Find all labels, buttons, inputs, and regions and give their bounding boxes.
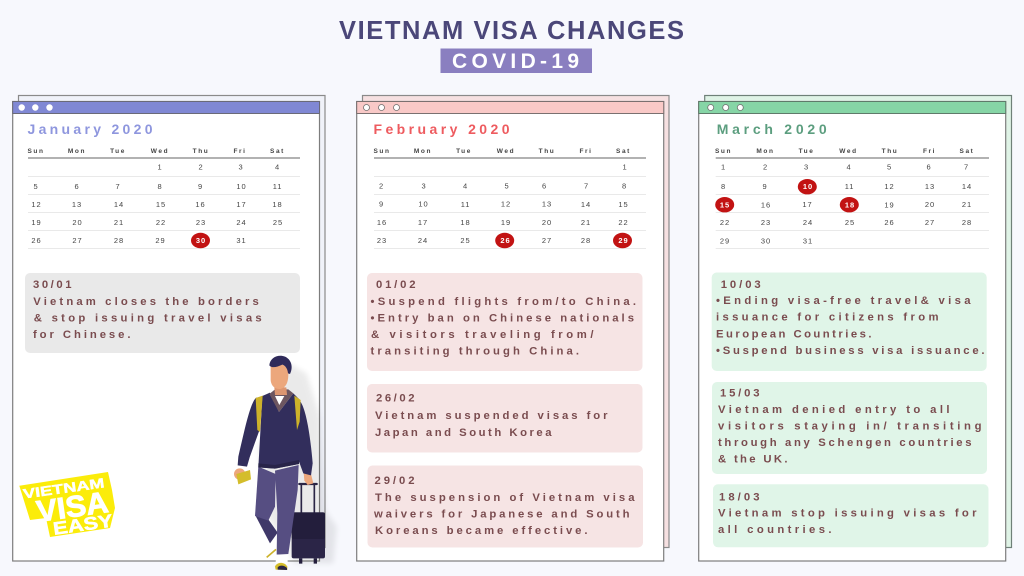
calendar: February: 29	[618, 236, 629, 245]
note: 15/03: Vietnam denied entry to all	[718, 404, 950, 416]
calendar: March: 2	[763, 162, 768, 172]
calendar: March: 8	[721, 182, 726, 191]
calendar: March: Tue	[799, 148, 814, 155]
note: 29/02: waivers for Japanese and South	[373, 509, 630, 521]
calendar: January: 27	[72, 236, 83, 245]
calendar: January: 19	[31, 218, 42, 227]
calendar: March: 5	[887, 162, 892, 172]
calendar: February: Fri	[579, 148, 593, 155]
calendar: January: 10	[236, 182, 247, 191]
calendar: March: 26	[884, 218, 895, 227]
calendar: March: Sun	[715, 148, 732, 155]
calendar: January: 1	[157, 162, 163, 172]
window header bar: March	[699, 102, 1006, 114]
calendar: February: 3	[421, 182, 427, 190]
calendar: March: 11	[845, 182, 854, 191]
calendar: January: Fri	[233, 148, 247, 155]
calendar: February: 22	[618, 218, 629, 227]
calendar: March: 19	[884, 200, 895, 209]
calendar: February: 10	[418, 200, 429, 208]
note: 29/02: 29/02	[374, 475, 414, 487]
calendar: January: 23	[196, 218, 206, 227]
calendar: February: Tue	[456, 148, 472, 155]
calendar: January: Wed	[151, 148, 169, 155]
calendar: January: 2	[198, 162, 204, 172]
calendar: February: Sat	[616, 148, 631, 155]
note: 26/02: Vietnam suspended visas for	[375, 410, 608, 422]
logo: Vietnam Visa Easy: EASY	[52, 511, 114, 539]
calendar: March: 7	[964, 162, 969, 172]
calendar: March: 18	[845, 200, 855, 209]
calendar: January: Thu	[193, 148, 209, 155]
calendar: January: 5	[33, 182, 39, 191]
calendar: January: 6	[74, 182, 80, 191]
note: 01/02: 01/02	[376, 279, 416, 291]
calendar: March: 23	[761, 218, 771, 227]
note: 26/02	[367, 384, 642, 452]
note: 30/01	[25, 273, 300, 353]
calendar: February: Wed	[497, 148, 515, 155]
note: 18/03: 18/03	[719, 492, 760, 504]
note: 01/02: transiting through China.	[370, 346, 579, 358]
calendar: January: 11	[273, 182, 282, 191]
note: 18/03	[713, 484, 988, 547]
note: 18/03: Vietnam stop issuing visas for	[718, 508, 977, 520]
calendar: March: 16	[761, 200, 771, 209]
calendar: February: 23	[377, 236, 387, 245]
calendar: February: Sun	[373, 148, 391, 155]
note: 15/03: visitors staying in/ transiting	[718, 421, 982, 433]
calendar: February: 27	[542, 236, 552, 245]
calendar: January: Sat	[270, 148, 285, 155]
note: 29/02: Koreans became effective.	[375, 525, 588, 537]
calendar: February: 15	[618, 200, 629, 209]
calendar: February: 9	[379, 200, 384, 208]
calendar: March: 22	[720, 218, 730, 227]
month heading: January 2020: January 2020	[28, 121, 153, 137]
calendar: March	[715, 148, 989, 248]
note: 01/02: & visitors traveling from/	[371, 329, 594, 341]
calendar: February: 14	[581, 200, 591, 209]
calendar: March: Fri	[923, 148, 936, 155]
logo: Vietnam Visa Easy: VISA	[34, 486, 110, 529]
note: 10/03: •Ending visa-free travel& visa	[716, 295, 971, 307]
calendar: January: 15	[156, 200, 166, 209]
calendar: March: 30	[761, 236, 771, 245]
calendar: February: 12	[501, 200, 511, 208]
calendar: January: 26	[31, 236, 42, 245]
note: 01/02	[367, 273, 642, 371]
note: 26/02: 26/02	[376, 393, 414, 405]
calendar: March: 10	[803, 182, 813, 191]
note: 10/03: 10/03	[721, 279, 761, 291]
note: 10/03: European Countries.	[716, 328, 872, 340]
calendar: January: 28	[114, 236, 124, 245]
calendar: January: 13	[72, 200, 82, 209]
calendar: January: 18	[272, 200, 283, 209]
calendar: February: 17	[418, 218, 428, 227]
calendar: January: 25	[273, 218, 283, 227]
window header bar: February	[357, 102, 664, 114]
note: 15/03: & the UK.	[718, 454, 788, 466]
calendar: March: 4	[846, 162, 852, 172]
illustration: traveller with suitcase	[234, 356, 337, 570]
note: 30/01: for Chinese.	[33, 329, 130, 341]
calendar: January	[27, 148, 300, 248]
note: 10/03: •Suspend business visa issuance.	[716, 345, 984, 357]
calendar: February: 7	[584, 182, 589, 190]
calendar: February: 25	[460, 236, 471, 245]
calendar: March: 3	[804, 162, 809, 172]
calendar: January: 24	[236, 218, 247, 227]
calendar: January: 8	[157, 182, 163, 191]
calendar: March: 20	[925, 200, 935, 209]
calendar: January: Mon	[68, 148, 86, 155]
month heading: March 2020: March 2020	[717, 121, 827, 137]
calendar: March: 25	[845, 218, 855, 227]
calendar: March: 12	[884, 182, 895, 191]
calendar: January: 16	[195, 200, 206, 209]
note: 29/02	[368, 466, 643, 548]
calendar: February: 2	[379, 182, 384, 190]
calendar: February: 5	[504, 182, 510, 190]
note: 01/02: •Entry ban on Chinese nationals	[370, 313, 634, 325]
calendar: February: 4	[463, 182, 468, 190]
calendar: January: 9	[198, 182, 203, 191]
calendar: March: 28	[962, 218, 972, 227]
panel: March 2020	[699, 96, 1012, 561]
title: VIETNAM VISA CHANGES	[339, 17, 684, 45]
calendar: January: 29	[155, 236, 166, 245]
calendar: February: 20	[542, 218, 552, 227]
calendar: February: 16	[377, 218, 387, 227]
calendar: February: Mon	[414, 148, 432, 155]
calendar: February: 8	[622, 182, 627, 190]
calendar: January: 7	[115, 182, 121, 191]
calendar: January: 20	[72, 218, 83, 227]
calendar: March: 27	[925, 218, 935, 227]
note: 10/03: issuance for citizens from	[716, 312, 938, 324]
calendar: February: Thu	[539, 148, 555, 155]
logo: Vietnam Visa Easy: VIETNAM	[22, 475, 105, 502]
note: 30/01: Vietnam closes the borders	[33, 296, 259, 308]
calendar: March: Sat	[960, 148, 974, 155]
calendar: March: 14	[962, 182, 972, 191]
calendar: January: Sun	[27, 148, 45, 155]
note: 18/03: all countries.	[718, 524, 832, 536]
note: 01/02: •Suspend flights from/to China.	[370, 296, 636, 308]
calendar: January: 31	[236, 236, 247, 245]
calendar: February: 24	[418, 236, 428, 245]
calendar: February	[373, 148, 646, 248]
calendar: March: 9	[762, 182, 768, 191]
calendar: January: 14	[114, 200, 124, 209]
calendar: February: 21	[581, 218, 591, 227]
calendar: January: 22	[156, 218, 166, 227]
calendar: March: Mon	[756, 148, 775, 155]
calendar: March: 6	[926, 162, 932, 172]
subtitle badge: COVID-19: COVID-19	[452, 50, 579, 73]
calendar: February: 1	[622, 162, 628, 172]
calendar: January: Tue	[110, 148, 126, 155]
calendar: March: 21	[962, 200, 972, 209]
note: 15/03	[712, 382, 987, 474]
month heading: February 2020: February 2020	[374, 121, 510, 137]
calendar: January: 3	[238, 162, 244, 172]
calendar: March: Thu	[882, 148, 898, 155]
calendar: February: 13	[542, 200, 552, 208]
calendar: February: 11	[461, 200, 470, 209]
note: 26/02: Japan and South Korea	[375, 427, 552, 439]
calendar: March: 29	[720, 236, 730, 245]
calendar: March: Wed	[839, 148, 858, 155]
note: 30/01: 30/01	[33, 279, 72, 291]
calendar: January: 17	[236, 200, 247, 209]
panel: February 2020	[357, 96, 669, 561]
calendar: March: 15	[720, 200, 730, 209]
calendar: February: 28	[581, 236, 591, 245]
calendar: February: 18	[460, 218, 471, 227]
note: 15/03: 15/03	[720, 388, 760, 400]
calendar: February: 6	[542, 182, 547, 190]
calendar: January: 30	[196, 236, 206, 245]
calendar: February: 26	[500, 236, 511, 245]
logo: Vietnam Visa Easy	[19, 472, 115, 542]
note: 15/03: through any Schengen countries	[718, 437, 972, 449]
note: 10/03	[712, 272, 987, 371]
calendar: March: 24	[803, 218, 813, 227]
window header bar: January	[13, 102, 319, 114]
calendar: January: 4	[275, 162, 280, 172]
calendar: March: 1	[721, 162, 726, 172]
calendar: February: 19	[501, 218, 511, 227]
note: 29/02: The suspension of Vietnam visa	[375, 492, 635, 504]
calendar: January: 21	[114, 218, 124, 227]
calendar: January: 12	[31, 200, 42, 209]
panel: January 2020	[13, 96, 325, 561]
calendar: March: 31	[803, 236, 813, 245]
calendar: March: 13	[925, 182, 935, 191]
note: 30/01: & stop issuing travel visas	[34, 313, 262, 325]
calendar: March: 17	[802, 200, 813, 209]
